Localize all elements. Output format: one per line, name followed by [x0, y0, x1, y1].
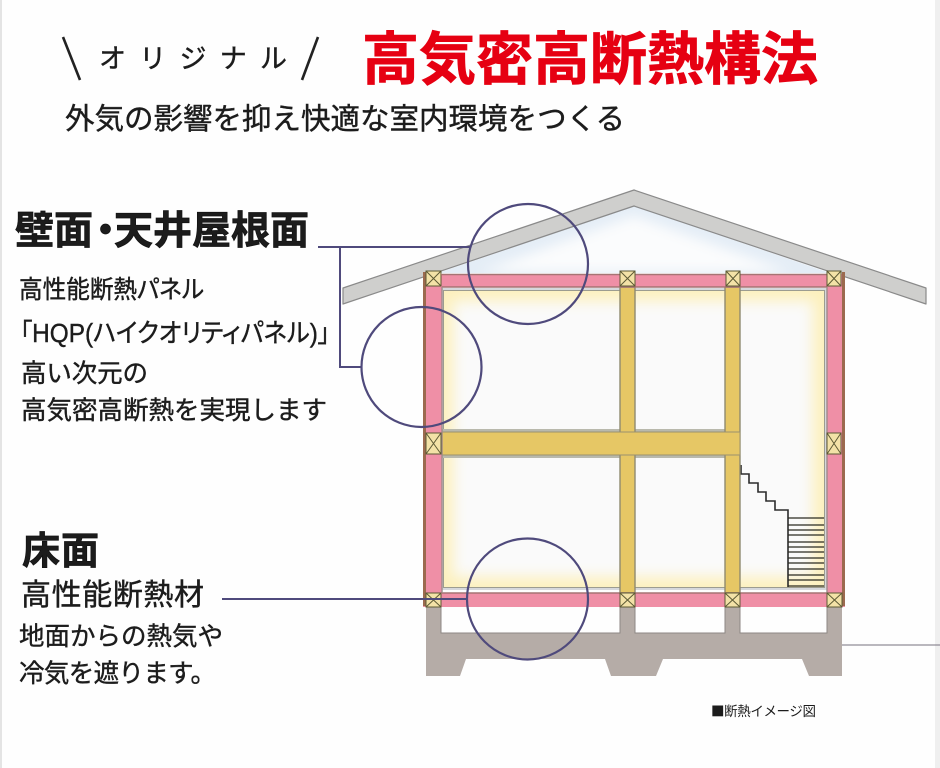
title: 高気密高断熱構法: [362, 28, 818, 92]
circle: roof: [468, 204, 588, 324]
structural posts and beam: [441, 287, 740, 593]
interior rooms with warm glow: [441, 288, 827, 590]
circle: wall: [362, 307, 482, 427]
circle: floor: [467, 538, 588, 660]
staircase: [741, 465, 824, 587]
joints: [426, 271, 842, 607]
heading: original label: [63, 37, 318, 80]
panel name: 高性能断熱パネル: [19, 276, 204, 304]
caption: ■断熱イメージ図: [711, 700, 816, 720]
insulated walls: [423, 272, 845, 607]
floor material: 高性能断熱材: [21, 579, 204, 612]
foundation: [426, 607, 842, 676]
subtitle: 外気の影響を抑え快適な室内環境をつくる: [65, 103, 625, 136]
floor description line 2: 冷気を遮ります。: [19, 660, 216, 688]
ground line: [842, 644, 940, 646]
callout circles and leader lines: [222, 204, 588, 660]
text block: wall and ceiling: [15, 210, 330, 425]
heading: floor: 床面: [22, 531, 99, 573]
leader: floor: [222, 598, 467, 600]
attic insulation: [438, 206, 830, 273]
description line 1: 高い次元の: [21, 360, 148, 388]
text block: floor: [19, 531, 223, 688]
description line 2: 高気密高断熱を実現します: [21, 397, 327, 425]
leader: wall and roof: [318, 247, 470, 367]
panel product name: 「HQP(ハイクオリティパネル)」: [20, 318, 330, 348]
roof: [343, 190, 926, 304]
heading: wall and roof: 壁面・天井屋根面: [15, 210, 309, 253]
heading: original label: オリジナル: [99, 44, 287, 74]
floor description line 1: 地面からの熱気や: [19, 623, 223, 651]
house diagram: [343, 190, 940, 676]
